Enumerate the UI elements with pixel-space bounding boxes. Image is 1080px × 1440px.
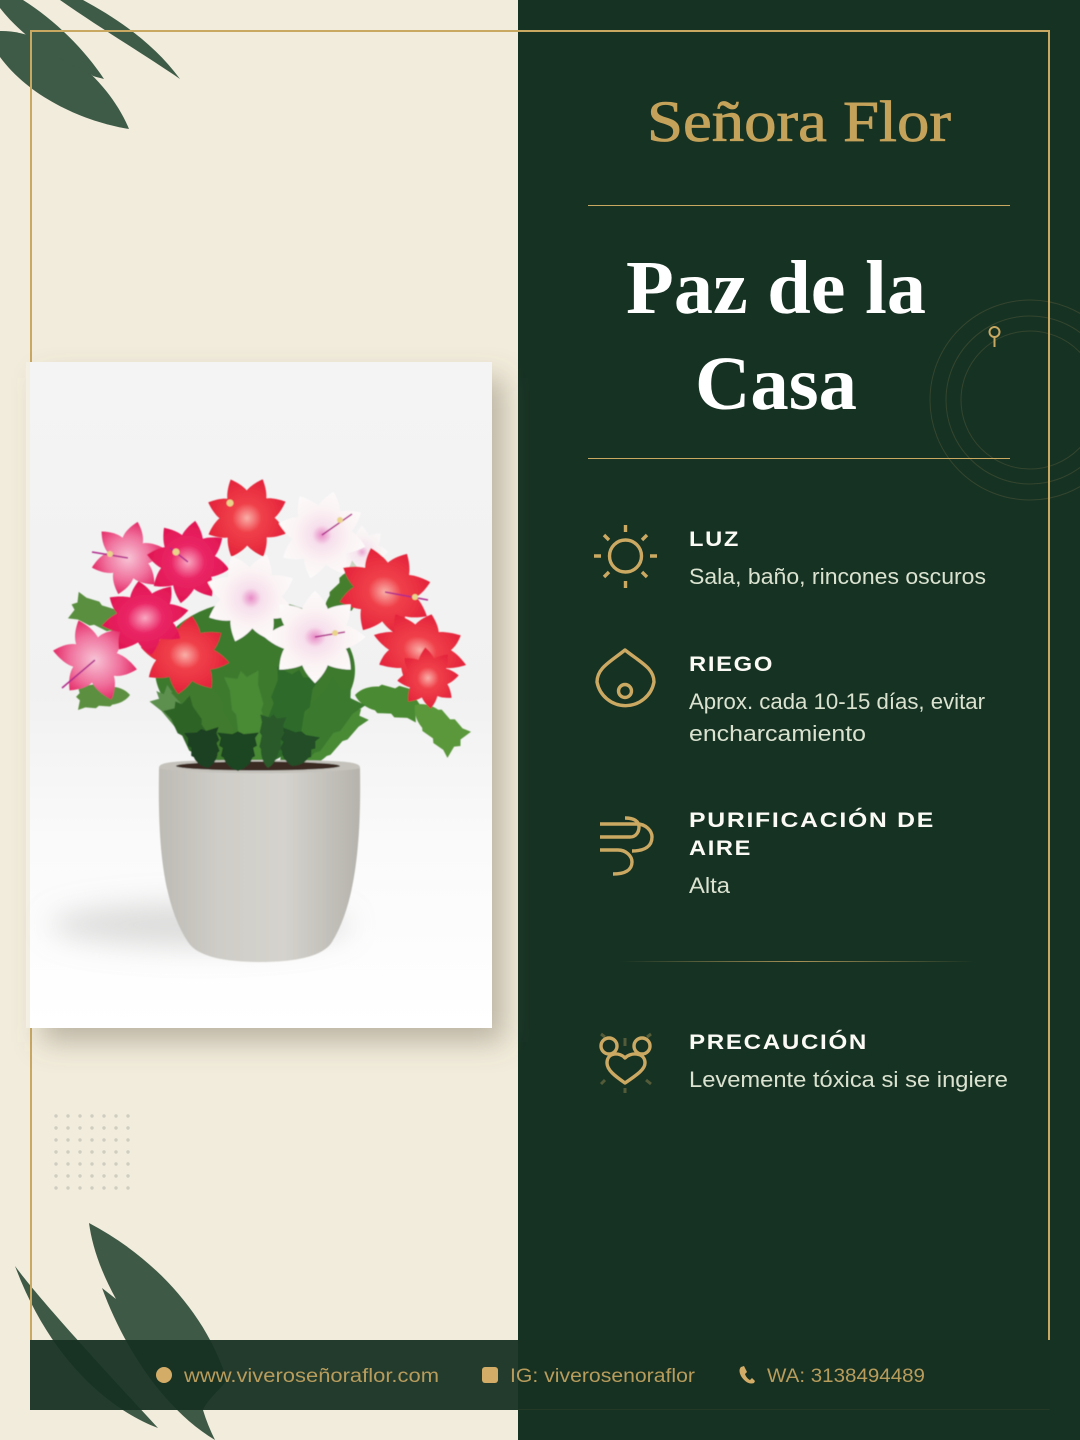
item: purificacion de aire [600,807,935,898]
plant title: Paz de la [626,246,926,330]
decorative dot grid [50,1110,134,1194]
icon: wind [600,818,652,874]
item: precaucion [601,1029,1008,1093]
text: riego [689,689,985,746]
pot rim and soil [159,760,360,773]
text: precaucion: Levemente tóxica si se ingiere [689,1067,1008,1092]
dark base leaves [184,713,320,771]
text: luz: Sala, baño, rincones oscuros [689,564,986,589]
flowers [82,512,174,604]
plant title [626,246,926,426]
panel: dark green right background [518,0,1080,1440]
icon: sun [594,525,657,588]
leaves [66,559,472,784]
plant title: Casa [695,342,857,426]
top divider [588,205,1010,206]
decorative concentric circles [930,300,1080,500]
decorative leaves: bottom left [15,1223,227,1440]
heading: luz: LUZ [689,527,740,551]
footer: instagram: IG: viverosenoraflor [510,1366,696,1387]
text: riego: Aprox. cada 10-15 días, evitar [689,689,985,714]
brand title: Señora Flor [647,89,951,154]
section divider [620,961,975,962]
item: luz [594,525,986,589]
pot ground shadow [50,903,350,947]
heading: purificacion de aire: PURIFICACIÓN DE [689,807,935,832]
footer: whatsapp: WA: 3138494489 [767,1366,925,1387]
footer bar [30,1340,1050,1410]
panel: cream left background [0,0,518,1440]
photo shadow [42,378,504,1042]
title divider [588,458,1010,459]
heading: purificacion de aire: AIRE [689,836,752,860]
photo: potted flowering cactus [26,362,492,1028]
heading: precaucion: PRECAUCIÓN [689,1029,868,1054]
text: purificacion de aire: Alta [689,873,731,898]
icon: heart and rings [601,1034,651,1093]
decorative leaves: top left [0,0,180,129]
pot [159,768,360,962]
text: riego: encharcamiento [689,721,866,746]
footer: website: www.viveroseñoraflor.com [183,1366,439,1387]
icon: small pin [990,327,1000,347]
foliage mass [155,600,355,740]
heading: riego: RIEGO [689,652,774,676]
heading: purificacion de aire [689,807,935,860]
icon: water drop [597,650,654,706]
stamens [62,514,428,688]
item: riego [597,650,985,746]
